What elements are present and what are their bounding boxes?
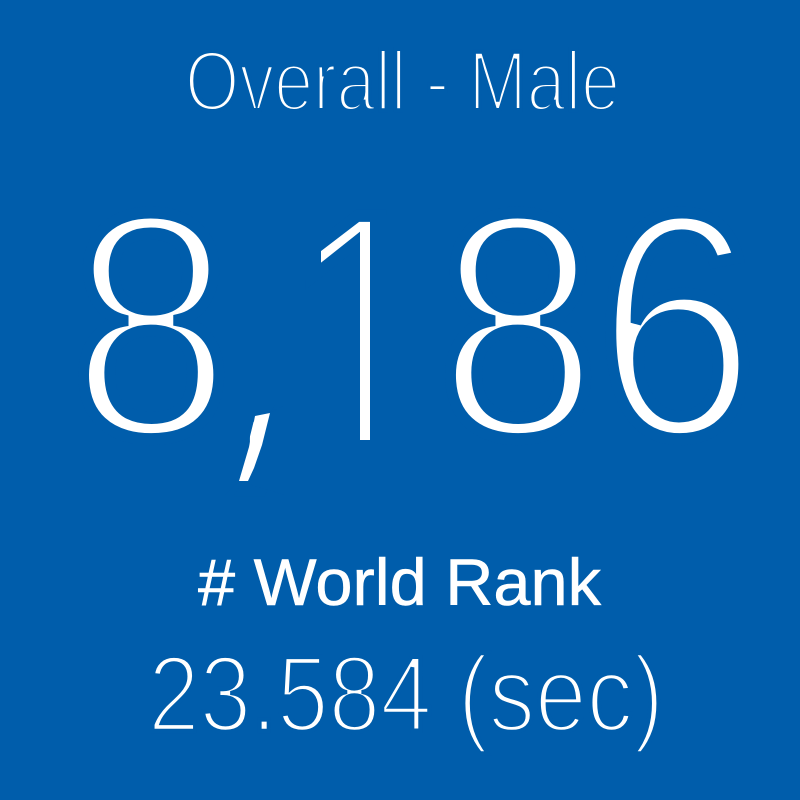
title: Overall - Male xyxy=(185,34,620,128)
main number: world rank value: 8,186 xyxy=(71,146,756,518)
label: world rank: # World Rank xyxy=(198,545,602,619)
time value: 23.584 (sec) xyxy=(148,633,664,754)
